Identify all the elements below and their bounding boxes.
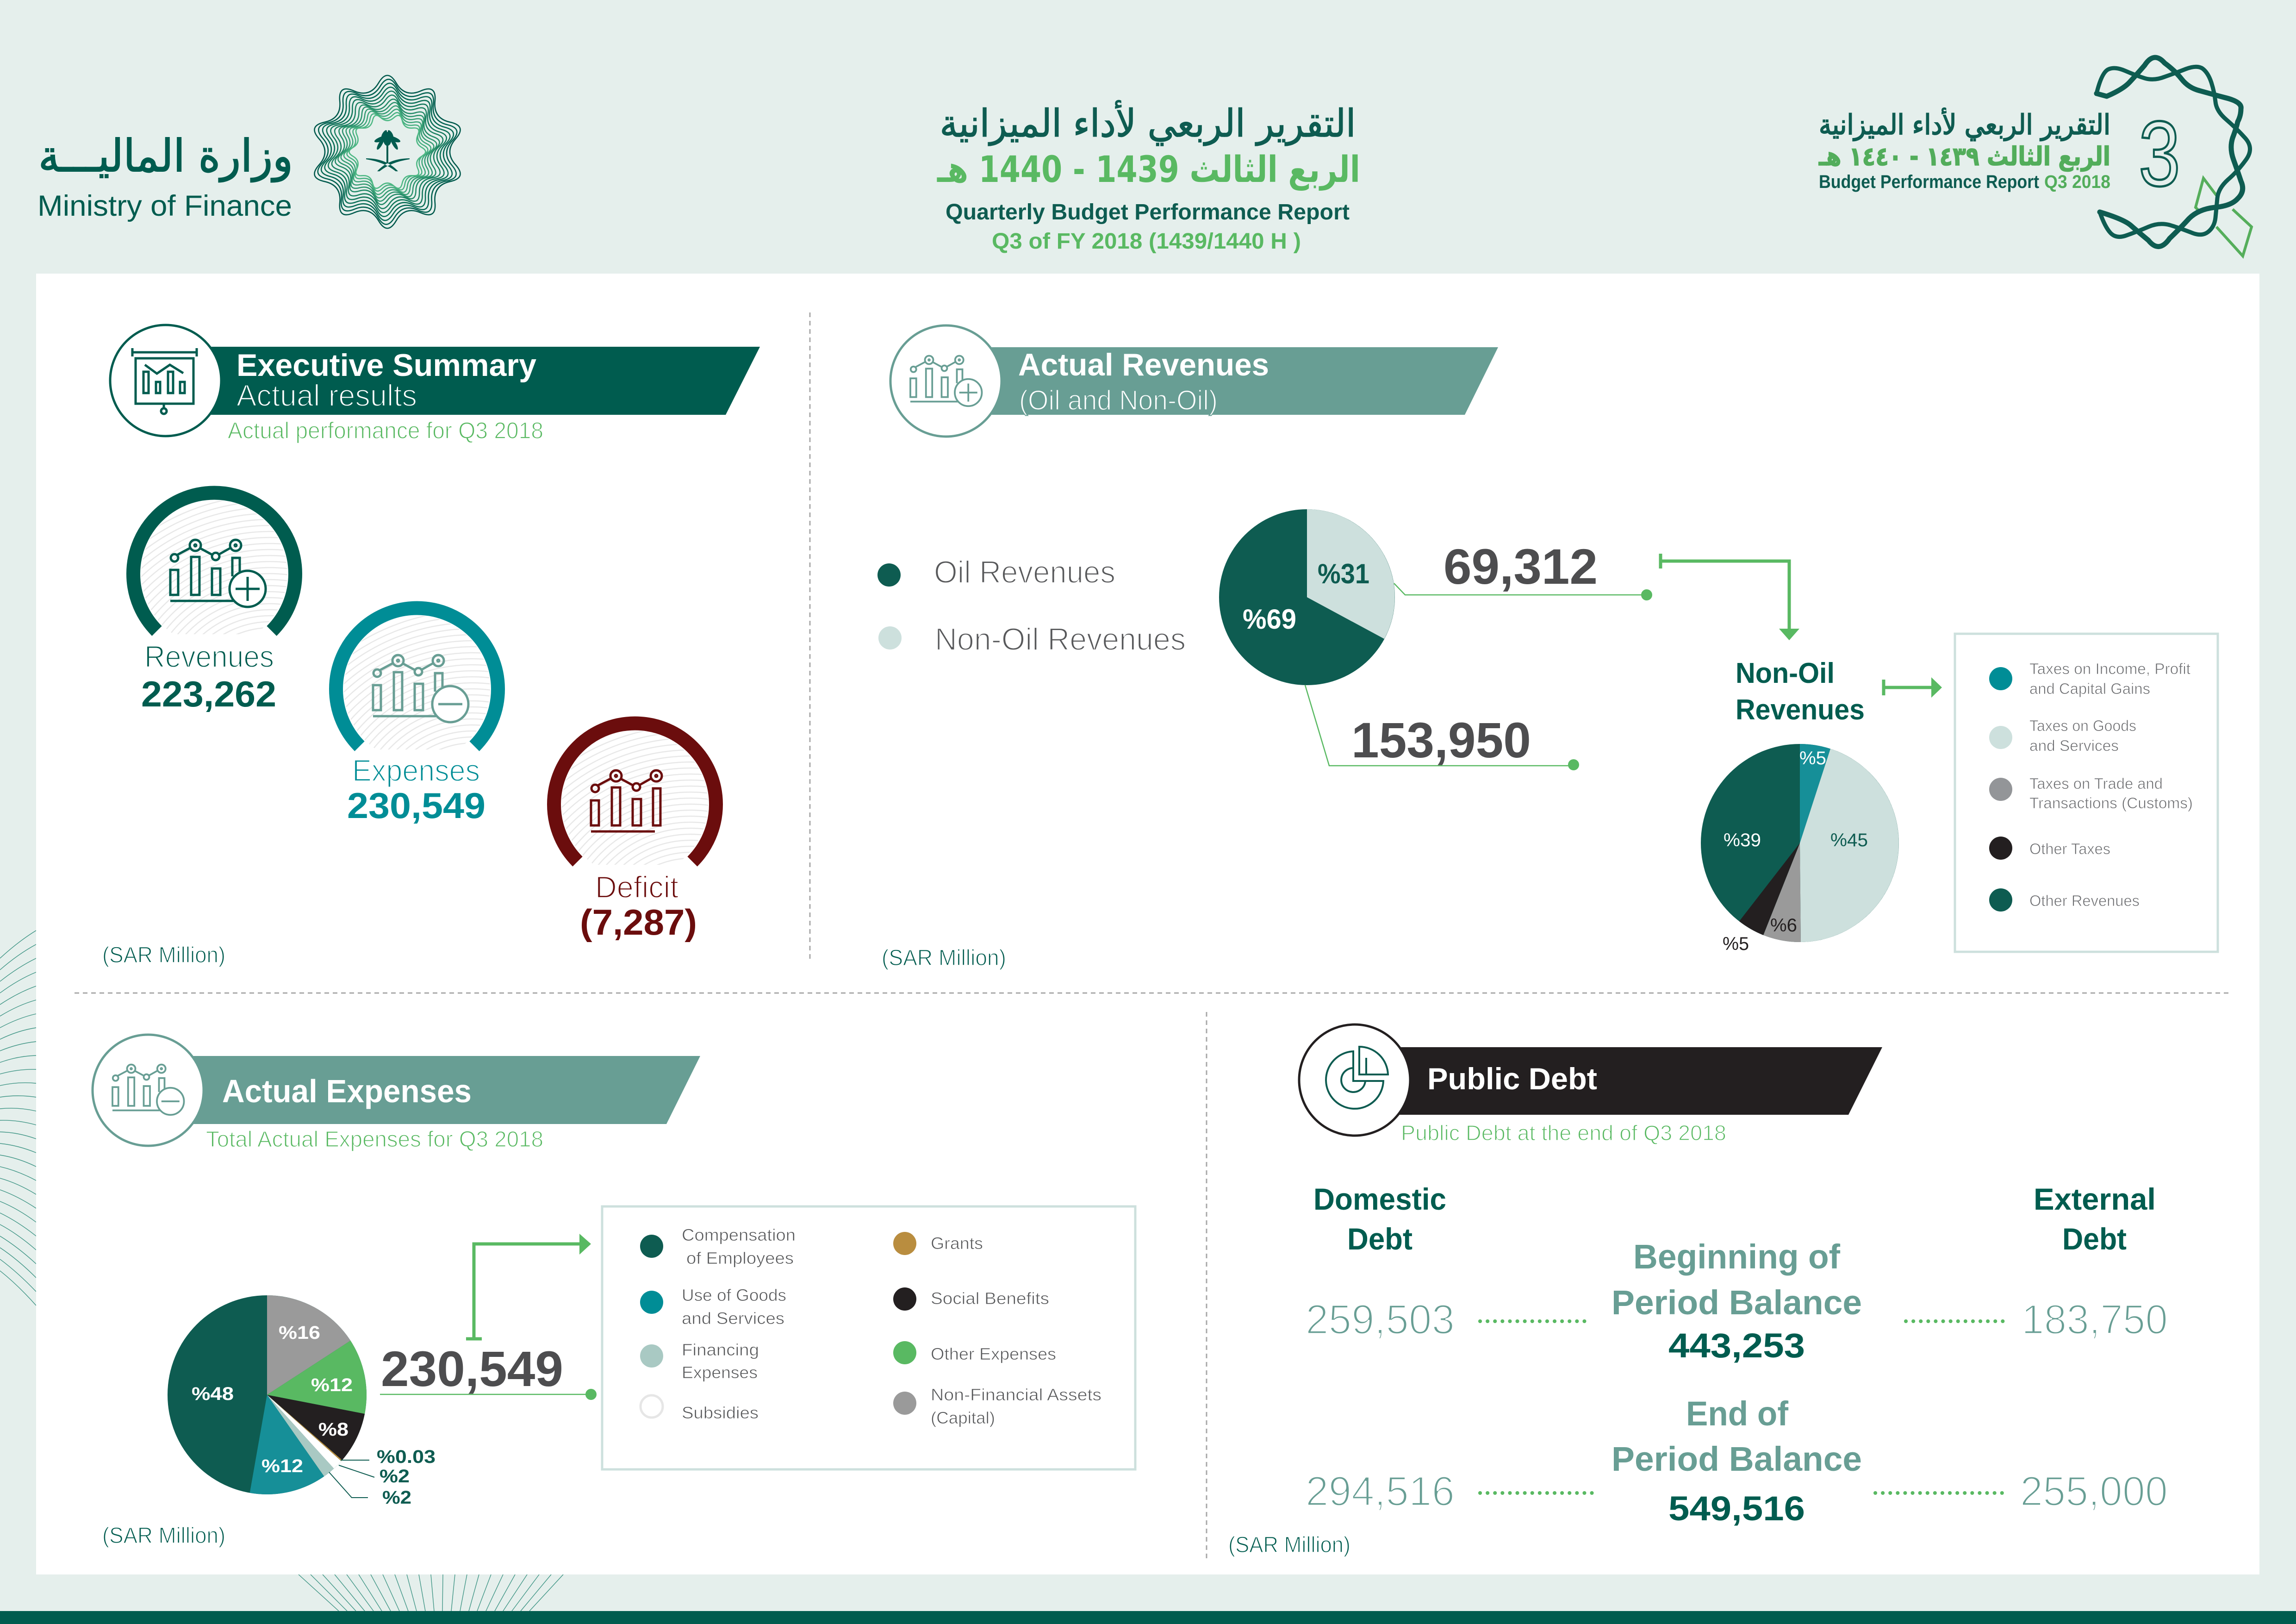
debt caption: Public Debt at the end of Q3 2018: [1401, 1121, 1726, 1145]
non-oil heading: Non-Oil: [1736, 657, 1835, 689]
debt unit note: (SAR Million): [1228, 1533, 1350, 1557]
beginning balance: Period Balance: [1612, 1283, 1862, 1322]
exec unit note: (SAR Million): [102, 943, 225, 968]
legend item: financing: [640, 1340, 759, 1382]
expenses pie chart: %48: [192, 1384, 234, 1404]
badge english title: Budget Performance Report: [1819, 172, 2039, 192]
legend item: goods taxes: Taxes on Goods: [2029, 717, 2136, 734]
non-oil pie chart: %6: [1770, 915, 1797, 936]
expenses header icon: [93, 1035, 204, 1146]
exec title: Executive Summary: [236, 348, 536, 383]
main white panel: [36, 274, 2259, 1574]
legend item: subsidies: Subsidies: [682, 1403, 759, 1422]
legend item: capital: [893, 1385, 1101, 1427]
debt title: Public Debt: [1427, 1062, 1597, 1096]
expenses banner: [139, 1056, 700, 1124]
expenses title: Actual Expenses: [222, 1073, 472, 1109]
external debt heading: Debt: [2062, 1222, 2127, 1256]
expenses unit note: (SAR Million): [102, 1524, 225, 1548]
legend item: goods and services: and Services: [682, 1309, 784, 1328]
end balance: 549,516: [1668, 1489, 1805, 1528]
small slice labels with leaders: %0.03: [377, 1447, 436, 1467]
logo emblem: [314, 75, 460, 228]
oil value callout: [1305, 685, 1579, 770]
revenues gauge: [35, 477, 505, 948]
beginning balance: 443,253: [1668, 1326, 1805, 1365]
expenses pie chart: %12: [261, 1456, 303, 1476]
legend item: other taxes: [1989, 837, 2110, 860]
expenses legend box: [602, 1206, 1135, 1469]
beginning balance: [1612, 1237, 1862, 1365]
external debt heading: [2034, 1182, 2156, 1256]
period arabic: الربع الثالث 1439 - 1440 هـ: [937, 149, 1360, 191]
exec caption: Actual performance for Q3 2018: [228, 418, 543, 443]
legend item: other revenues: [1989, 888, 2140, 912]
legend item: goods taxes: [1989, 717, 2136, 754]
report badge top right: [1818, 57, 2252, 256]
non-oil heading: Revenues: [1736, 694, 1865, 726]
arrow to non-oil breakdown: [1661, 554, 1799, 640]
total expenses callout: 230,549: [381, 1341, 563, 1397]
legend item: capital: Non-Financial Assets: [931, 1385, 1101, 1404]
legend item: grants: Grants: [931, 1234, 983, 1253]
domestic debt heading: [1313, 1182, 1446, 1256]
logo: Ministry of Finance: [37, 75, 460, 228]
badge leaf shape: [2196, 178, 2252, 256]
badge numeral 3: 3: [2139, 102, 2180, 206]
arrow to legend: [1884, 677, 1942, 698]
badge arabic title: التقرير الربعي لأداء الميزانية: [1819, 108, 2110, 141]
legend item: other revenues: Other Revenues: [2029, 892, 2140, 909]
external beginning value: 183,750: [2022, 1297, 2168, 1343]
beginning balance: Beginning of: [1633, 1237, 1840, 1276]
non-oil value callout: 69,312: [1444, 538, 1598, 594]
panel: actual expenses: [93, 1035, 1135, 1548]
external end value: 255,000: [2020, 1468, 2168, 1515]
legend item: goods and services: Use of Goods: [682, 1286, 786, 1305]
exec banner: [185, 347, 760, 415]
legend item: compensation: Compensation: [682, 1225, 796, 1244]
legend item: capital: (Capital): [931, 1408, 995, 1427]
legend item: social benefits: [893, 1287, 1049, 1311]
title arabic: التقرير الربعي لأداء الميزانية: [940, 100, 1356, 146]
non-oil pie chart: %39: [1724, 830, 1761, 850]
legend item: financing: Expenses: [682, 1363, 758, 1382]
oil vs non-oil pie chart: %69: [1243, 604, 1296, 635]
revenues label: Revenues: [144, 639, 274, 674]
legend item: social benefits: Social Benefits: [931, 1289, 1049, 1308]
legend item: goods and services: [640, 1286, 786, 1328]
legend item: income taxes: and Capital Gains: [2029, 680, 2150, 697]
non-oil pie chart: %45: [1830, 830, 1868, 850]
badge ribbon: [2097, 57, 2250, 247]
legend item: customs: [1989, 775, 2193, 812]
revenues value: 223,262: [141, 674, 276, 714]
revenues unit note: (SAR Million): [882, 946, 1006, 970]
arrow to expenses legend: [466, 1234, 591, 1339]
expenses pie chart: %8: [318, 1419, 348, 1440]
debt banner: [1379, 1047, 1882, 1115]
legend item: other expenses: Other Expenses: [931, 1344, 1056, 1363]
revenues header icon: [890, 325, 1002, 437]
title english: Quarterly Budget Performance Report: [946, 200, 1350, 225]
legend item: customs: Taxes on Trade and: [2029, 775, 2163, 792]
oil vs non-oil pie chart: %31: [1318, 558, 1369, 589]
deficit value: (7,287): [580, 902, 697, 943]
legend item: income taxes: [1989, 660, 2190, 697]
domestic debt heading: Debt: [1347, 1222, 1412, 1256]
legend item: other taxes: Other Taxes: [2029, 840, 2110, 857]
period english: Q3 of FY 2018 (1439/1440 H ): [992, 229, 1301, 254]
legend: oil revenues: Oil Revenues: [934, 555, 1115, 590]
legend item: goods taxes: and Services: [2029, 737, 2119, 754]
exec subtitle: Actual results: [236, 378, 417, 412]
legend item: compensation: [640, 1225, 796, 1268]
small slice labels with leaders: %2: [380, 1466, 410, 1487]
expenses gauge: [237, 593, 708, 1063]
oil vs non-oil pie chart: [1219, 509, 1395, 685]
non-oil heading: [1736, 657, 1865, 726]
legend item: customs: Transactions (Customs): [2029, 794, 2193, 812]
non-oil value callout: [1394, 538, 1652, 600]
domestic beginning value: 259,503: [1306, 1297, 1455, 1343]
exec icon circle with presentation board: [110, 325, 221, 436]
oil value callout: 153,950: [1351, 712, 1531, 768]
legend item: income taxes: Taxes on Income, Profit: [2029, 660, 2190, 677]
non-oil legend box: [1955, 634, 2218, 952]
revenues subtitle: (Oil and Non-Oil): [1019, 385, 1218, 416]
non-oil pie chart: %5: [1723, 934, 1749, 954]
expenses pie chart: %16: [279, 1323, 320, 1343]
expenses pie chart: [168, 1295, 367, 1494]
legend item: grants: [893, 1232, 983, 1255]
badge arabic period: الربع الثالث ١٤٣٩ - ١٤٤٠ هـ: [1818, 142, 2110, 172]
non-oil pie chart: [1701, 744, 1899, 954]
logo palm and swords: [366, 129, 410, 171]
panel: executive summary: [35, 325, 926, 1178]
badge english date: Q3 2018: [2044, 172, 2110, 192]
dotted connectors: [1480, 1321, 2008, 1493]
logo wordmark arabic: وزارة الماليـــة: [38, 130, 293, 182]
debt header icon: [1299, 1024, 1410, 1136]
section dividers: [75, 312, 2229, 1560]
end balance: Period Balance: [1612, 1440, 1862, 1478]
logo wordmark english: Ministry of Finance: [37, 190, 292, 222]
legend: non-oil revenues: Non-Oil Revenues: [935, 622, 1186, 657]
deficit gauge: [455, 708, 926, 1178]
domestic end value: 294,516: [1306, 1468, 1455, 1515]
expenses label: Expenses: [352, 753, 480, 787]
expenses caption: Total Actual Expenses for Q3 2018: [206, 1127, 543, 1152]
expenses value: 230,549: [347, 785, 485, 826]
legend item: other expenses: [893, 1341, 1056, 1364]
external debt heading: External: [2034, 1182, 2156, 1216]
revenues title: Actual Revenues: [1018, 347, 1269, 382]
small slice labels with leaders: %2: [382, 1487, 411, 1508]
non-oil pie chart: %5: [1799, 748, 1826, 768]
small slice labels with leaders: [329, 1447, 436, 1508]
footer bar: [0, 1611, 2296, 1624]
left edge wave decoration: [0, 931, 36, 1305]
panel: public debt: [1228, 1024, 2168, 1557]
legend item: subsidies: [641, 1395, 759, 1422]
legend item: compensation: of Employees: [686, 1249, 794, 1268]
revenues banner: [972, 347, 1498, 415]
report title block: [937, 100, 1360, 254]
legend item: financing: Financing: [682, 1340, 759, 1359]
expenses pie chart: %12: [311, 1375, 353, 1395]
bottom wave decoration: [299, 1574, 563, 1611]
domestic debt heading: Domestic: [1313, 1182, 1446, 1216]
end balance: End of: [1686, 1394, 1788, 1433]
deficit label: Deficit: [595, 870, 678, 904]
panel: actual revenues: [877, 325, 2218, 970]
end balance: [1612, 1394, 1862, 1528]
